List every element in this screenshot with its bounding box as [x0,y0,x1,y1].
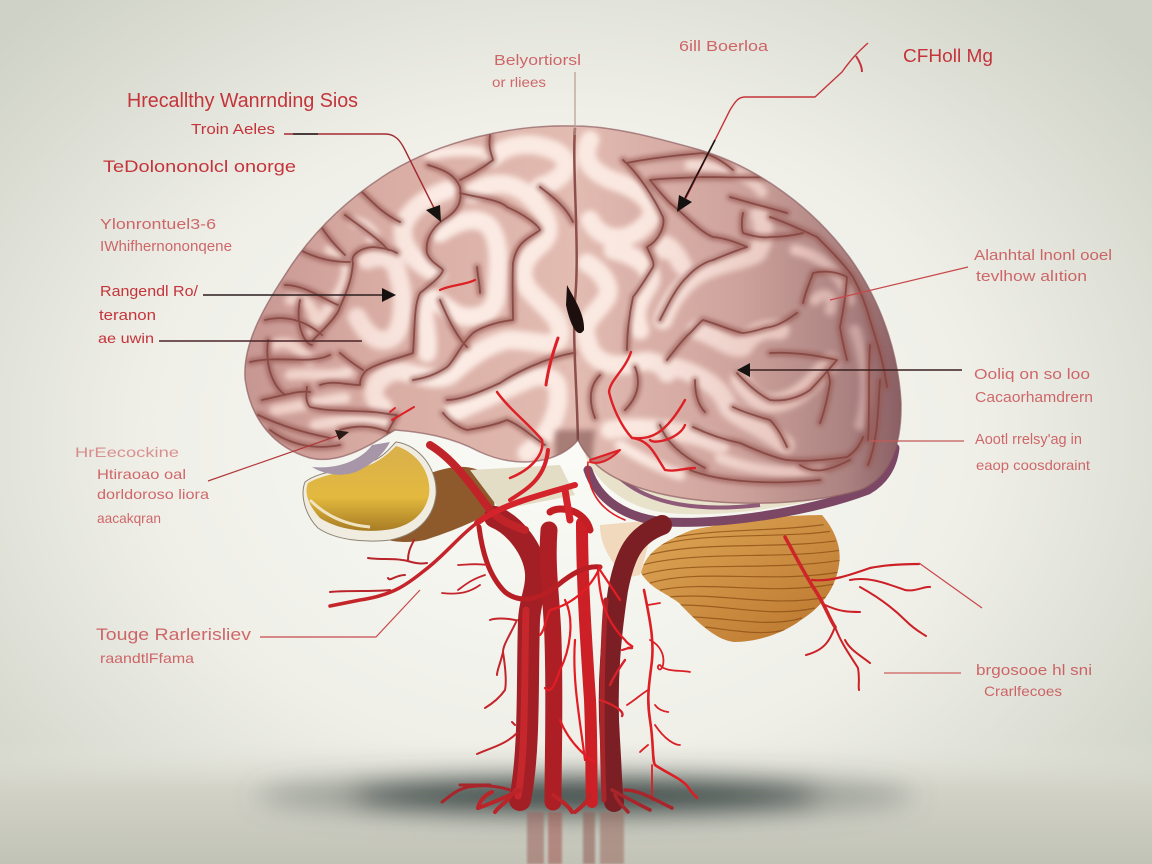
brain [245,126,901,503]
label block: top center [492,52,581,90]
leader: right upper [830,267,968,300]
label block: right 3 [975,431,1090,473]
label block: right 2 [974,366,1093,406]
label block: left 4: HrEecockine [75,444,179,460]
left loop [479,527,600,599]
leader: right lower [870,440,964,442]
label block: bottom right: brgosooe hl sni [976,662,1092,679]
leader: bottom right [884,672,961,674]
thin third trunk [582,523,592,802]
right thin artery [644,590,697,798]
label block: upper left: Troin Aeles [191,121,275,138]
title: warning signs: Hrecallthy Wanrnding Sios [127,90,358,112]
cerebellum left: yellow lobe [303,442,495,542]
root feet [442,785,510,802]
leader: right middle arrow [737,363,962,377]
floor shadow [255,776,915,816]
artery tree [330,445,930,812]
floor [0,740,1152,864]
label block: right 1: tevlhow alıtion [976,268,1087,285]
label block: upper left: TeDolononolcl onorge [103,157,296,176]
cerebellum right: striped orange lobe [641,515,842,642]
label block: left 2 [100,216,232,255]
label block: left 3: Rangendl Ro/ [100,283,199,300]
label block: top center: Belyortiorsl [494,52,581,69]
label: top right: CFHoll Mg [903,46,993,66]
left trunk [495,517,536,800]
leader: top-left arrow [284,134,441,222]
central fissure [574,128,578,450]
label block: right 3: Aootl rrelsy'ag in [975,431,1082,448]
label block: left 4: dorldoroso liora [97,486,209,502]
label block: bottom left: raandtlFfama [100,650,194,666]
leader lines [159,43,982,673]
leader: bottom right angled [919,563,982,608]
label block: left 4 [75,444,209,526]
label block: bottom right: Crarlfecoes [984,683,1062,699]
label block: left 2: Ylonrontuel3-6 [100,216,216,233]
label block: left 3: ae uwin [98,330,154,346]
beige inner base and band [312,442,895,578]
label block: top center: or rliees [492,74,546,90]
label block: bottom left: Touge Rarlerisliev [96,625,252,644]
gyri folds [250,128,887,482]
label: top middle: 6ill Boerloa [679,38,769,55]
middle trunk [548,530,554,802]
leader: top center line [574,72,576,135]
label block: right 2: Ooliq on so loo [974,366,1090,383]
label block: bottom right [976,662,1092,699]
label block: left 4: Htiraoao oal [97,466,186,482]
left branch [330,523,477,606]
label block: bottom left [96,625,252,666]
reflection of arteries [527,812,624,864]
label block: right 1 [974,247,1112,285]
leader: left lower line [159,340,362,342]
thin left vessels [485,618,517,708]
label block: right 3: eaop coosdoraint [976,457,1090,473]
label block: right 2: Cacaorhamdrern [975,389,1093,406]
label block: left 4: aacakqran [97,510,161,526]
surface arteries on brain [390,280,695,520]
upper stems [430,445,525,530]
label block: left 2: IWhifhernononqene [100,238,232,255]
label block: right 1: Alanhtal lnonl ooel [974,247,1112,264]
leader: bottom left [260,590,420,637]
leader: left bottom arrow [208,430,349,481]
cerebellum vessels [785,537,835,627]
leader: left middle arrow [203,288,396,302]
leader: top right arrow [677,43,868,212]
right dark trunk [609,525,662,802]
label block: left 3 [98,283,199,346]
central fine vessels [540,567,632,762]
label block: upper left [103,121,296,176]
label block: left 3: teranon [99,307,156,324]
